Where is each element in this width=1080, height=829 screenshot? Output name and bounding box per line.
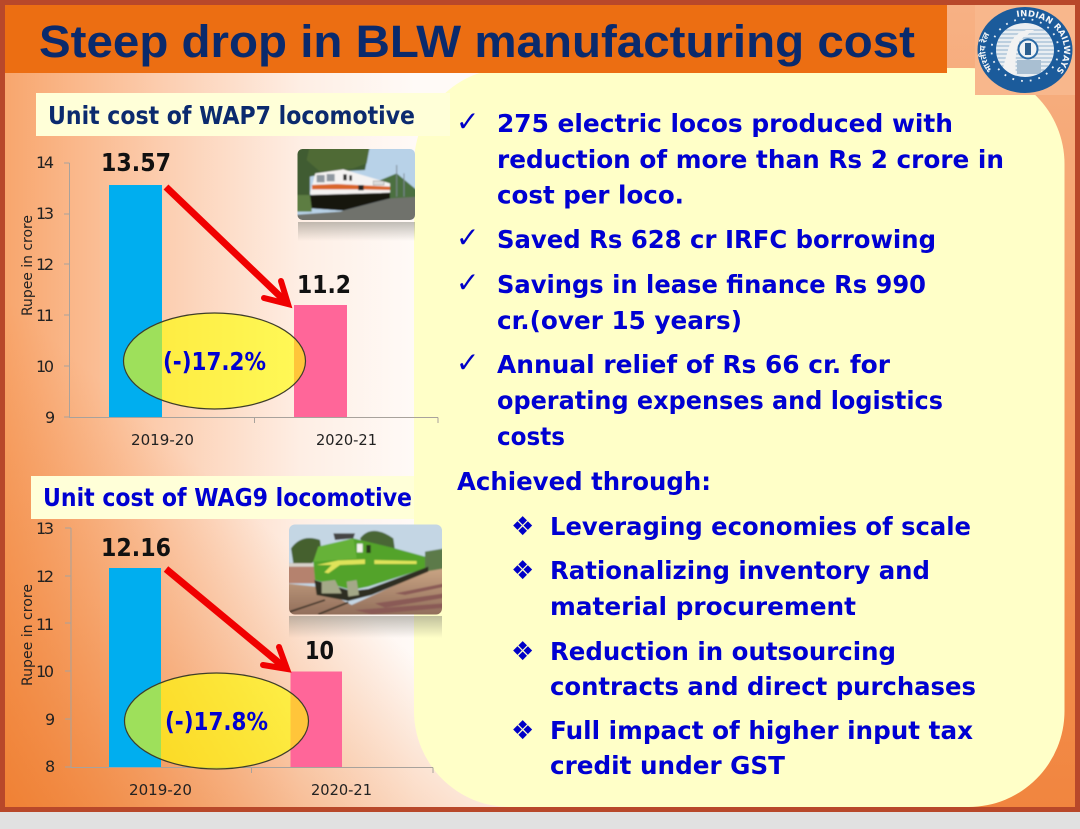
item: outsourcing: ❖ — [511, 637, 534, 667]
y axis labels: Rupee in crore — [20, 584, 36, 686]
item: outsourcing — [511, 637, 976, 701]
item: input tax credit: Full impact of higher input tax — [550, 716, 973, 745]
title: Steep drop in BLW manufacturing cost — [39, 16, 915, 67]
x axis labels: 2020-21 — [311, 781, 372, 799]
icon: Indian Railways logo — [975, 6, 1075, 95]
value labels — [101, 533, 334, 665]
y axis labels: 11 — [36, 615, 54, 634]
item: electric locos — [456, 105, 1004, 210]
yellow content panel — [414, 68, 1064, 807]
callout: percent drop — [124, 313, 306, 409]
y axis labels: Rupee in crore — [20, 215, 36, 316]
chart: WAP7 unit cost — [20, 93, 450, 449]
item: inventory — [511, 556, 930, 621]
item: outsourcing: Reduction in outsourcing — [550, 637, 896, 666]
heading: WAG9 — [31, 476, 414, 519]
item: annual relief: ✓ — [456, 346, 479, 379]
x axis labels — [131, 431, 377, 449]
arrow: decline — [166, 569, 287, 669]
heading: WAP7 — [36, 93, 450, 136]
x axis labels: 2020-21 — [316, 431, 377, 449]
y axis labels: 14 — [36, 153, 54, 172]
bar: 2020-21 — [290, 672, 342, 767]
y axis labels: 10 — [36, 357, 54, 376]
photo: WAP7 locomotive — [298, 149, 415, 238]
bar: 2019-20 — [109, 568, 161, 767]
item: economies of scale: ❖ — [511, 512, 534, 542]
x axis labels: 2019-20 — [129, 781, 192, 799]
text block: achieved through — [457, 467, 976, 780]
item: outsourcing: contracts and direct purchases — [550, 672, 976, 701]
chart: WAG9 unit cost — [20, 476, 447, 799]
y axis labels: 12 — [36, 567, 54, 586]
axes — [65, 528, 433, 773]
arrow: decline — [166, 187, 288, 304]
y axis labels: 12 — [36, 255, 54, 274]
y axis labels: 9 — [45, 710, 55, 729]
heading: WAG9: Unit cost of WAG9 locomotive — [43, 483, 412, 512]
item: lease finance: Savings in lease finance Rs 990 — [497, 270, 926, 299]
item: annual relief — [456, 346, 943, 451]
item: inventory: material procurement — [550, 592, 856, 621]
value labels: 11.2 — [297, 270, 351, 299]
icon: Indian Railways logo: INDIAN RAILWAYS — [1016, 10, 1070, 74]
item: electric locos: ✓ — [456, 105, 479, 138]
y axis labels: 9 — [45, 408, 55, 427]
x axis labels: 2019-20 — [131, 431, 194, 449]
item: inventory: ❖ — [511, 556, 534, 586]
item: electric locos: cost per loco. — [497, 180, 684, 210]
item: input tax credit: credit under GST — [550, 751, 785, 780]
value labels: 12.16 — [101, 533, 171, 562]
callout: percent drop — [124, 673, 308, 769]
item: lease finance: ✓ — [456, 266, 479, 299]
heading: WAP7: Unit cost of WAP7 locomotive — [48, 101, 415, 130]
bar: 2019-20 — [109, 185, 162, 417]
y axis labels — [20, 519, 55, 776]
bar: 2020-21 — [294, 305, 347, 417]
item: electric locos: 275 electric locos produced with — [497, 109, 953, 138]
value labels: 10 — [305, 636, 334, 665]
item: input tax credit — [511, 716, 973, 780]
photo: WAG9 locomotive — [289, 524, 442, 635]
value labels — [101, 148, 351, 299]
callout: percent drop: (-)17.2% — [163, 347, 266, 376]
item: lease finance — [456, 266, 926, 335]
item: annual relief: Annual relief of Rs 66 cr. for — [497, 350, 891, 379]
item: input tax credit: ❖ — [511, 716, 534, 746]
item: IRFC borrowing: ✓ — [456, 221, 479, 254]
y axis labels: 11 — [36, 306, 54, 325]
title bar — [5, 5, 947, 73]
item: annual relief: costs — [497, 422, 565, 451]
value labels: 13.57 — [101, 148, 171, 177]
y axis labels: 13 — [36, 204, 54, 223]
callout: percent drop: (-)17.8% — [165, 707, 268, 736]
item: inventory: Rationalizing inventory and — [550, 556, 930, 585]
y axis labels: 10 — [36, 662, 54, 681]
item: electric locos: reduction of more than Rs 2 crore in — [497, 145, 1004, 174]
item: annual relief: operating expenses and logistics — [497, 386, 943, 415]
text block: key results — [456, 105, 1004, 451]
item: IRFC borrowing: Saved Rs 628 cr IRFC borrowing — [497, 225, 936, 254]
icon: Indian Railways logo: भारतीय रेल — [978, 32, 990, 72]
x axis labels — [129, 781, 372, 799]
y axis labels: 13 — [36, 519, 54, 538]
y axis labels: 8 — [45, 757, 55, 776]
subheading: Achieved through: — [457, 467, 711, 496]
y axis labels — [20, 153, 55, 427]
axes — [64, 163, 438, 423]
item: lease finance: cr.(over 15 years) — [497, 306, 742, 335]
item: economies of scale: Leveraging economies of scale — [550, 512, 971, 541]
